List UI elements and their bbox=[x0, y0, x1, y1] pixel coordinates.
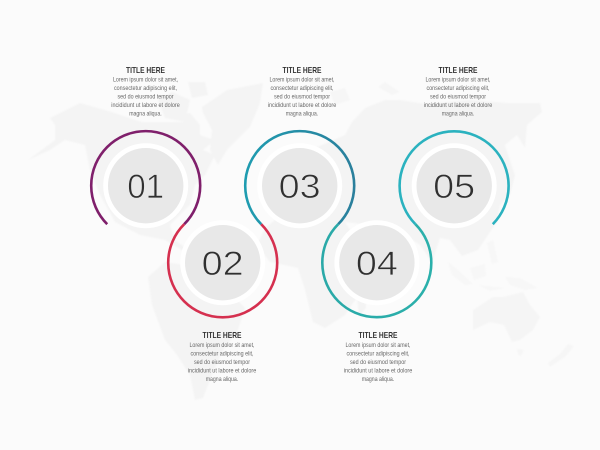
text block 01: TITLE HERE bbox=[126, 65, 165, 75]
text block 05: TITLE HERE bbox=[438, 65, 478, 75]
circle 03 bbox=[245, 131, 354, 226]
text block 01: sed do eiusmod tempor bbox=[118, 94, 174, 100]
number 02: 02 bbox=[202, 245, 244, 283]
arc 05 bbox=[400, 131, 509, 224]
number 04: 04 bbox=[356, 245, 398, 283]
text block 03: sed do eiusmod tempor bbox=[274, 94, 330, 100]
text block 02: incididunt ut labore et dolore bbox=[188, 368, 257, 374]
text block 05: incididunt ut labore et dolore bbox=[424, 103, 493, 109]
number 01: 01 bbox=[127, 168, 164, 206]
text block 03: Lorem ipsum dolor sit amet, bbox=[270, 78, 335, 84]
circle 05 bbox=[400, 131, 509, 226]
text block 04: magna aliqua. bbox=[362, 377, 395, 383]
text block 03: magna aliqua. bbox=[286, 112, 319, 118]
world map bbox=[28, 82, 574, 400]
text block 01 bbox=[111, 65, 180, 118]
text block 04: sed do eiusmod tempor bbox=[350, 360, 406, 366]
number 03: 03 bbox=[279, 168, 321, 206]
arc 04 bbox=[322, 224, 431, 317]
text block 04: incididunt ut labore et dolore bbox=[344, 368, 413, 374]
text block 01: consectetur adipiscing elit, bbox=[114, 86, 177, 92]
circle 02 bbox=[168, 223, 277, 317]
text block 05 bbox=[424, 65, 493, 118]
text block 05: sed do eiusmod tempor bbox=[430, 94, 486, 100]
text block 03: TITLE HERE bbox=[282, 65, 322, 75]
text block 02 bbox=[188, 330, 257, 383]
text block 02: consectetur adipiscing elit, bbox=[190, 351, 254, 357]
text block 03: consectetur adipiscing elit, bbox=[270, 86, 334, 92]
text block 04: TITLE HERE bbox=[358, 330, 398, 340]
number 05: 05 bbox=[433, 168, 475, 206]
text block 03 bbox=[268, 65, 337, 118]
text block 02: magna aliqua. bbox=[206, 377, 239, 383]
text block 05: consectetur adipiscing elit, bbox=[426, 86, 490, 92]
text block 04 bbox=[344, 330, 413, 383]
text block 03: incididunt ut labore et dolore bbox=[268, 103, 337, 109]
text block 05: magna aliqua. bbox=[442, 112, 475, 118]
circle 01 bbox=[91, 131, 200, 226]
text block 05: Lorem ipsum dolor sit amet, bbox=[426, 78, 491, 84]
circle 04 bbox=[322, 223, 431, 317]
text block 02: Lorem ipsum dolor sit amet, bbox=[190, 343, 255, 349]
text block 02: sed do eiusmod tempor bbox=[194, 360, 250, 366]
text block 01: magna aliqua. bbox=[129, 112, 162, 118]
text block 04: consectetur adipiscing elit, bbox=[346, 351, 410, 357]
text block 04: Lorem ipsum dolor sit amet, bbox=[346, 343, 411, 349]
text block 01: incididunt ut labore et dolore bbox=[111, 103, 180, 109]
arc 03 bbox=[245, 131, 354, 224]
arc 02 bbox=[168, 224, 277, 317]
text block 02: TITLE HERE bbox=[202, 330, 242, 340]
arc 01 bbox=[91, 131, 200, 224]
text block 01: Lorem ipsum dolor sit amet, bbox=[113, 78, 178, 84]
